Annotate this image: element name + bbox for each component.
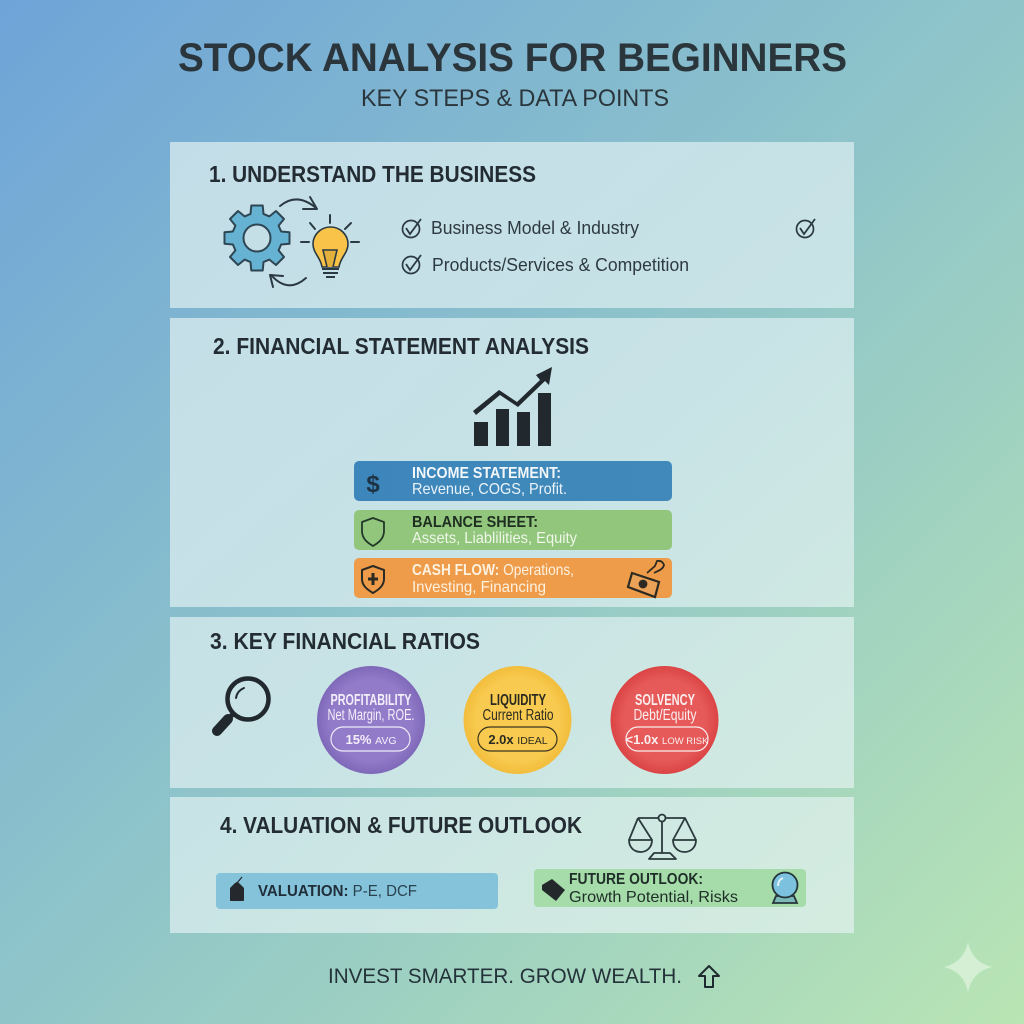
bar: balance sheet: Assets, Liablilities, Equity bbox=[412, 530, 577, 547]
icon: plant shield bbox=[362, 566, 384, 593]
bar: income statement bbox=[354, 461, 672, 501]
bar: income statement: INCOME STATEMENT: bbox=[412, 465, 561, 482]
icon: gear bbox=[224, 206, 290, 270]
bar: valuation bbox=[216, 873, 498, 909]
ratio: liquidity: LIQUIDITY bbox=[490, 692, 546, 709]
ratio: profitability: Net Margin, ROE. bbox=[328, 707, 414, 724]
bar: balance sheet bbox=[354, 510, 672, 550]
bar: cash flow: CASH FLOW: Operations, bbox=[412, 562, 574, 579]
ratio: profitability: 15% AVG bbox=[345, 732, 397, 747]
icon: dollar: $ bbox=[366, 471, 380, 498]
icon: cycle arrows bbox=[270, 197, 317, 287]
bar: future outlook bbox=[534, 869, 806, 907]
ratio: solvency bbox=[610, 666, 718, 774]
ratio: liquidity bbox=[464, 666, 572, 774]
icon: up arrow bbox=[699, 966, 719, 987]
panel: financial statement analysis bbox=[170, 318, 854, 607]
icon: sparkle bbox=[944, 942, 992, 992]
icon: magnifier bbox=[217, 678, 268, 731]
icon: price tag bbox=[230, 877, 244, 901]
icon: balance scale bbox=[629, 814, 696, 859]
footer tagline: INVEST SMARTER. GROW WEALTH. bbox=[328, 965, 682, 988]
heading: section 4: 4. VALUATION & FUTURE OUTLOOK bbox=[220, 812, 582, 838]
ratio: liquidity: Current Ratio bbox=[482, 707, 554, 724]
ratio: profitability: PROFITABILITY bbox=[330, 692, 412, 709]
ratio: profitability bbox=[317, 666, 425, 774]
ratio: solvency: Debt/Equity bbox=[634, 707, 697, 724]
heading: section 1: 1. UNDERSTAND THE BUSINESS bbox=[209, 161, 536, 187]
icon: growth chart bbox=[473, 367, 552, 446]
heading: section 2: 2. FINANCIAL STATEMENT ANALYSIS bbox=[213, 333, 589, 359]
icon: light bulb bbox=[301, 215, 359, 277]
checklist item: products: Products/Services & Competition bbox=[432, 255, 689, 275]
bar: cash flow: Investing, Financing bbox=[412, 579, 546, 596]
ratio: liquidity: 2.0x IDEAL bbox=[488, 732, 548, 747]
bar: future outlook: Growth Potential, Risks bbox=[569, 889, 738, 906]
panel: valuation and future outlook bbox=[170, 797, 854, 933]
panel: key financial ratios bbox=[170, 617, 854, 788]
bar: income statement: Revenue, COGS, Profit. bbox=[412, 481, 567, 498]
bar: future outlook: FUTURE OUTLOOK: bbox=[569, 871, 703, 888]
icon: crystal ball bbox=[772, 872, 798, 903]
icon: money bbox=[628, 561, 664, 597]
bar: cash flow bbox=[354, 558, 672, 598]
subtitle: KEY STEPS & DATA POINTS bbox=[361, 85, 669, 112]
icon: extra check bbox=[796, 219, 815, 238]
panel: understand the business bbox=[170, 142, 854, 308]
title: STOCK ANALYSIS FOR BEGINNERS bbox=[178, 36, 847, 80]
icon: dark tag bbox=[542, 879, 565, 901]
heading: section 3: 3. KEY FINANCIAL RATIOS bbox=[210, 628, 480, 654]
ratio: solvency: <1.0x LOW RISK bbox=[626, 732, 709, 747]
bar: balance sheet: BALANCE SHEET: bbox=[412, 514, 538, 531]
bar: valuation: VALUATION: P-E, DCF bbox=[258, 883, 417, 900]
ratio: solvency: SOLVENCY bbox=[635, 692, 695, 709]
icon: shield bbox=[362, 518, 384, 546]
checklist item: business model: Business Model & Industry bbox=[431, 218, 639, 238]
